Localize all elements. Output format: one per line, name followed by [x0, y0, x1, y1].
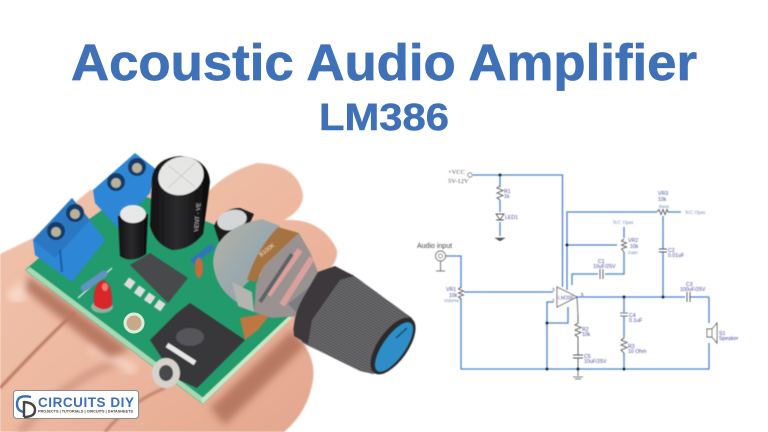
R3 [621, 335, 646, 355]
C3 [680, 282, 706, 302]
blue resistor and orange part [192, 246, 213, 278]
LED1: LED1 [505, 215, 518, 221]
VR2: Gain [628, 250, 638, 255]
R2: R2 [582, 327, 589, 333]
VCC terminal: +VCC [448, 169, 465, 176]
R3: R3 [628, 344, 635, 350]
subtitle: LM386 [319, 97, 449, 139]
potentiometer: B100K [259, 243, 276, 259]
IC chip [124, 253, 188, 311]
C3: 100uF/25V [680, 287, 706, 293]
R1: 1k [504, 194, 510, 200]
C1 [593, 259, 616, 279]
logo mark [17, 396, 35, 417]
C5 [573, 350, 607, 369]
C3: C3 [686, 282, 693, 288]
circuit board [25, 190, 292, 404]
VCC terminal [448, 169, 472, 185]
logo badge [14, 390, 138, 418]
terminal block 2 [93, 153, 157, 228]
R3: 10 Ohm [628, 349, 646, 355]
VR3: Bass [659, 204, 670, 209]
large capacitor [150, 152, 210, 250]
small capacitor right [214, 206, 254, 262]
junction nodes [498, 174, 664, 370]
audio input [417, 243, 452, 271]
VR2: VR2 [628, 238, 638, 244]
wires [444, 175, 709, 369]
ground output [573, 369, 583, 379]
LM386 op-amp: 5 [581, 292, 584, 297]
photo: amplifier module in hand [0, 152, 424, 432]
VCC terminal: 5V-12V [448, 178, 469, 185]
R1 [497, 186, 511, 200]
LM386 op-amp: LM386 [558, 296, 574, 302]
VR1: Volume [444, 298, 460, 303]
R2: 10k [582, 332, 591, 338]
speaker: S1 [719, 331, 725, 337]
speaker [707, 323, 739, 343]
ground LED [495, 238, 505, 241]
LM386 op-amp: 3 [552, 287, 555, 292]
LM386 op-amp: 2 [552, 298, 555, 303]
R1: R1 [504, 189, 511, 195]
LED1 [496, 214, 518, 221]
VR1: 10k [449, 293, 458, 299]
VR3: VR3 [658, 191, 668, 197]
VR3 [657, 191, 706, 216]
C2: 0.01uF [668, 253, 684, 259]
circuit schematic [417, 169, 739, 379]
VR1: VR1 [446, 287, 456, 293]
speaker: Speaker [719, 336, 739, 342]
mounting hole [125, 314, 143, 332]
small capacitor [118, 205, 148, 260]
resistor [78, 268, 112, 298]
VR2 [613, 221, 639, 255]
C2 [659, 248, 684, 259]
C5: 10uF/25V [584, 359, 607, 365]
C4 [620, 313, 642, 324]
C1: 10uF/25V [593, 264, 616, 270]
C1: C1 [598, 259, 605, 265]
VR3: N/C Open [685, 211, 706, 216]
large capacitor: VENT - VE [194, 203, 203, 232]
C2: C2 [668, 248, 675, 254]
LM386 op-amp [552, 287, 584, 315]
logo wordmark: CIRCUITS DIY [38, 395, 134, 410]
C5: C5 [584, 354, 591, 360]
knob [293, 266, 424, 382]
C4: C4 [629, 313, 636, 319]
R2 [575, 315, 591, 350]
hand [0, 163, 337, 432]
VR2: 10k [630, 244, 639, 250]
C4: 0.1uF [629, 318, 642, 324]
VR3: 10k [658, 197, 667, 203]
VR1 [444, 287, 464, 303]
logo tagline: PROJECTS | TUTORIALS | CIRCUITS | DATASHEETS [38, 410, 133, 414]
audio jack [150, 303, 245, 388]
audio input: Audio input [417, 243, 452, 250]
VR2: N/C Open [613, 221, 634, 226]
title: Acoustic Audio Amplifier [71, 34, 697, 91]
terminal block 1 [33, 198, 105, 282]
red LED [91, 280, 113, 313]
potentiometer [213, 219, 322, 340]
